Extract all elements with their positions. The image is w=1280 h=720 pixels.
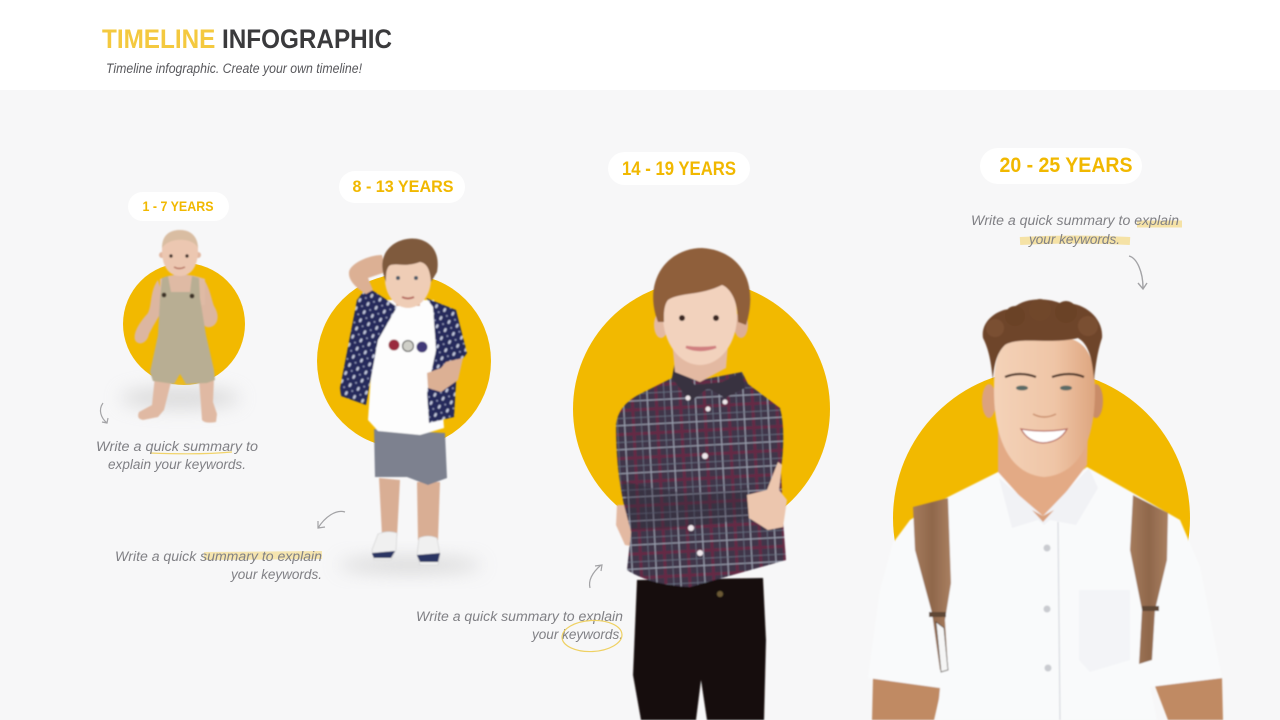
- panel: 1 - 7 years: [96, 192, 259, 472]
- title: TIMELINE INFOGRAPHIC: [102, 24, 392, 54]
- yellow circle: [893, 370, 1190, 666]
- age pill: 1 - 7 years: 1 - 7 YEARS: [142, 198, 214, 214]
- age pill: 1 - 7 years: [128, 192, 229, 221]
- summary text: your keywords.: [1028, 232, 1120, 247]
- highlight: keywords circle: [561, 619, 623, 653]
- photo: boy with raised arm: [340, 239, 467, 565]
- header band: [0, 0, 1280, 90]
- highlight: explain your keywords: [1020, 224, 1182, 241]
- floor shadow: [120, 387, 240, 409]
- yellow circle: [123, 263, 245, 385]
- arrow: [100, 403, 108, 423]
- highlight: summary to explain: [204, 555, 322, 556]
- panel: 8 - 13 years: [115, 171, 491, 582]
- summary text: [416, 609, 623, 642]
- age pill: 20 - 25 years: [980, 148, 1142, 184]
- arrow: [590, 565, 602, 588]
- summary text: [971, 213, 1179, 247]
- photo: baby: [135, 230, 218, 423]
- summary text: explain your keywords.: [108, 457, 246, 472]
- yellow circle: [573, 280, 830, 538]
- summary text: Write a quick summary to explain: [416, 609, 623, 624]
- panel: 14 - 19 years: [416, 152, 830, 720]
- summary text: [96, 439, 259, 472]
- summary text: Write a quick summary to explain: [971, 213, 1179, 228]
- yellow circle: [317, 274, 491, 448]
- summary text: Write a quick summary to explain: [115, 549, 322, 564]
- age pill: 14 - 19 years: [608, 152, 750, 185]
- panel: 20 - 25 years: [868, 148, 1223, 720]
- summary text: Write a quick summary to: [96, 439, 259, 454]
- highlight: quick underline: [150, 452, 232, 454]
- summary text: [115, 549, 322, 582]
- age pill: 14 - 19 years: 14 - 19 YEARS: [622, 159, 736, 180]
- summary text: your keywords.: [531, 627, 623, 642]
- arrow: [1129, 256, 1147, 289]
- age pill: 8 - 13 years: 8 - 13 YEARS: [352, 177, 454, 196]
- summary text: your keywords.: [230, 567, 322, 582]
- floor shadow: [338, 557, 482, 573]
- arrow: [318, 511, 345, 528]
- photo: boy in plaid shirt: [616, 248, 787, 720]
- age pill: 20 - 25 years: 20 - 25 YEARS: [1000, 154, 1132, 177]
- photo: young man with backpack: [868, 299, 1223, 720]
- subtitle: Timeline infographic. Create your own timeline!: [106, 61, 362, 76]
- age pill: 8 - 13 years: [339, 171, 465, 203]
